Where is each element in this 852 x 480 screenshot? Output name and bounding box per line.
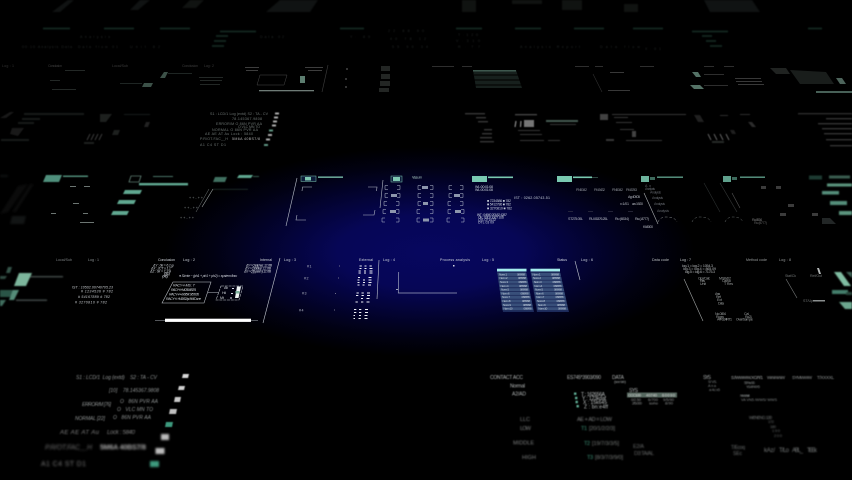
formula text block: ΔY : 0k = 6.1 ψ xyxy=(152,264,174,268)
third layer: left text block: P.R/OT.FAC__H xyxy=(200,137,228,141)
far layer: dim data row text: Y: 89 xyxy=(350,35,370,39)
panel: data code log: Data xyxy=(718,302,724,306)
panel: data code log: Cat.No xyxy=(722,279,731,283)
readout text: center upper right: OK : 02/03 10/27 1/26 xyxy=(478,216,504,220)
formula text block: ΔX : JCT x 1.1° xyxy=(150,266,173,270)
panel: measurements #1 to #4 with dot grid: #2 xyxy=(304,276,308,280)
mid-far panel row: right xyxy=(432,66,852,93)
panel: data code log: MSB/02 xyxy=(719,276,731,280)
panel: data code log xyxy=(652,258,753,322)
coordinates list with teal bullets: X : 15k645 xyxy=(583,400,607,406)
SYS mini table: 2/5.000 xyxy=(632,400,643,406)
bottom-right: contact panel text: A2/AD xyxy=(512,392,526,398)
bottom-right: risk levels blurred xyxy=(513,417,654,461)
readout text: upper right panel: Analysis xyxy=(654,202,665,206)
bottom-right: risk levels blurred: LLC xyxy=(520,417,530,423)
third layer: left text block: 5M6A 40BS7/8 xyxy=(232,137,260,141)
mid-far panel row: left: Log : 1 xyxy=(2,64,14,68)
far layer: dim data row text: Analysis xyxy=(80,35,110,39)
panel: measurements #1 to #4 with dot grid: #3 xyxy=(302,292,306,296)
table left: 088/88 xyxy=(522,295,530,299)
bottom-right: contact panel text xyxy=(490,375,677,410)
third layer: left text block: NORMAL O 86N PVR AA xyxy=(212,128,259,132)
small indicator box: Ab xyxy=(224,286,228,290)
panel: data code log: Cal xyxy=(744,312,749,316)
table left: Norm 4 xyxy=(500,284,509,288)
panel: data code log: log.1 = log.2 = 1054.3 xyxy=(682,264,713,268)
bottom-left: heavily blurred foreground: A1 C4 ST D1 xyxy=(41,461,86,468)
bottom-right: system panel: S:/WWWW.XGR/1 xyxy=(731,375,763,380)
log box with four rows xyxy=(162,282,219,303)
bottom-right: system panel: YI:14:R4:X5 xyxy=(746,385,760,389)
status text lines: [10] 78.145367.9808 xyxy=(108,388,159,394)
panel: method code log: ST/Up xyxy=(803,299,813,303)
far layer: dim data row text: Data flow xyxy=(600,45,640,49)
panel: status tables xyxy=(497,258,593,312)
bottom-right: risk levels blurred: MIDDLE xyxy=(513,440,534,446)
far layer: dim data row text: R:77 xyxy=(458,45,480,49)
bottom-right: system list and blurred footer: 180 xyxy=(770,424,777,429)
readout text: center upper right xyxy=(475,185,550,224)
coordinates list with teal bullets: Y : 123kdaf xyxy=(582,396,607,402)
panel: measurements #1 to #4 with dot grid xyxy=(299,258,379,319)
thin lines and labels: upper-left panel: + + - + + xyxy=(184,206,198,210)
teal data bars: upper right edge xyxy=(809,176,852,215)
bottom-right: system list and blurred footer: T/Lo xyxy=(779,448,790,454)
status text lines: O VLC MN TO xyxy=(117,407,153,413)
IST text block: # 3270810 # 782 xyxy=(75,300,107,304)
panel: data code log: Over/Sample xyxy=(736,318,753,322)
table left: Norm 3 xyxy=(500,280,508,284)
table right: 088/88 xyxy=(557,303,565,307)
panel: process analysis axis chart: Log : 5 xyxy=(482,258,494,262)
bottom-right: system list and blurred footer: SEc xyxy=(733,451,742,457)
table right: 088/88 xyxy=(556,299,565,303)
readout text: upper right panel: Ru:(6534) xyxy=(615,217,629,221)
panel: status tables: Status xyxy=(557,258,567,262)
table left xyxy=(497,269,534,312)
table left: Norm 6 xyxy=(502,291,510,295)
far layer: dim data row text: 40 78 12 xyxy=(390,37,426,41)
log headings row xyxy=(56,258,296,262)
panel: data code log: Unit xyxy=(700,282,706,286)
far layer: dim data row text: Analysis Report xyxy=(520,45,580,49)
readout text: center upper right: ■ 5412786 ■ 782 xyxy=(487,202,511,206)
small indicator box: Mt xyxy=(220,296,224,300)
third layer: left text block: 78.145367.9808 xyxy=(232,117,262,121)
bottom-right: system panel: T/XXXXL xyxy=(817,375,834,380)
slanted divider xyxy=(377,260,379,299)
table left: 088/88 xyxy=(518,276,526,280)
bottom-right: system panel: S/ VS. xyxy=(708,380,717,384)
table right: Norm 10 xyxy=(538,307,548,311)
panel: process analysis axis chart: Process analysis xyxy=(440,258,470,262)
formula text block: ΔY = Q(alpha) : 12.7/B xyxy=(245,264,273,268)
bottom-left: blurred foreground lines xyxy=(59,430,136,436)
bottom-right: risk levels blurred: T1 xyxy=(581,426,587,432)
status text lines: ERROR/M [76] xyxy=(82,402,112,408)
SYS mini table: 6/700 xyxy=(648,397,659,402)
readout text: upper right panel: Analysis xyxy=(650,190,661,194)
table right: 088/88 xyxy=(552,276,560,280)
log headings row: Log : 3 xyxy=(284,258,296,262)
bottom-right: system list and blurred footer: 172 xyxy=(768,419,775,424)
panel: status tables: Log : 6 xyxy=(581,258,593,262)
bottom-left: heavily blurred foreground: 5M6A 40BS7/8 xyxy=(100,444,146,452)
log headings row: Internal xyxy=(260,258,272,262)
SYS mini table: CCC100 xyxy=(628,392,642,398)
panel: measurements #1 to #4 with dot grid: #1 xyxy=(307,264,312,268)
panel: method code log: Log : 8 xyxy=(779,258,791,262)
bottom-left: blurred foreground lines: Lock : 5840 xyxy=(107,430,136,436)
far layer: dim data row text xyxy=(22,29,661,51)
bottom-right: risk levels blurred: [8/3/7/3/9/0] xyxy=(595,455,623,461)
coordinates list with teal bullets: Z : bn:e4ff xyxy=(584,404,609,410)
readout text: upper right panel: FM.5432 xyxy=(594,188,605,192)
panel: data code log: Data code xyxy=(652,258,669,262)
readout text: upper right panel: Ag 40905 xyxy=(628,195,640,199)
panel: data code log: Res xyxy=(700,279,705,283)
table right: 088/88 xyxy=(558,307,566,311)
bottom-right: system panel: VA VN5 /WWS/ WWS xyxy=(741,398,777,402)
third layer: left text block: O VLC MN TO xyxy=(238,125,260,129)
readout text: center upper right: ■ 3270810 ■ 782 xyxy=(487,206,512,210)
third layer: left text block: AE AE AT Au Lock : 5840 xyxy=(205,132,253,136)
status text lines: O 86N PVR AA xyxy=(120,399,159,405)
SYS mini table: 9/5/90 xyxy=(663,397,675,402)
panel: method code log: Ref/Out xyxy=(810,274,822,278)
dot grid group 1 xyxy=(354,266,372,319)
status text lines: S1 : LCD/1 Log (extd) S2 : TA - CV xyxy=(76,375,158,381)
table right: 088/88 xyxy=(554,284,562,288)
bottom-left: heavily blurred foreground xyxy=(41,434,169,468)
slanted divider xyxy=(263,258,280,323)
table left: 088/88 xyxy=(522,299,530,303)
third layer: left text block: A1 C4 ST D1 xyxy=(200,143,226,147)
readout text: center upper right: ■ 7234586 ■ 782 xyxy=(487,199,511,203)
SYS mini table: so/no xyxy=(649,400,659,406)
formula text block: ΔX = Q(system) 12.7/B xyxy=(243,270,272,274)
far layer: dim data row text: Data 02 xyxy=(260,35,284,39)
bottom-right: system panel: a:4c:x5 xyxy=(709,388,720,392)
thin lines and labels: upper-left panel: + + - + + xyxy=(189,196,203,200)
third layer: center-right block xyxy=(465,113,756,143)
bottom-right: contact panel text: Normal xyxy=(510,384,525,390)
IST text block xyxy=(72,286,113,304)
bottom-right: system list and blurred footer: TEEk xyxy=(807,448,818,454)
readout text: center upper right: WL:00:01:08 xyxy=(475,188,493,192)
third layer: left text block xyxy=(200,112,269,147)
readout text: upper right panel: Analysis xyxy=(652,196,663,200)
readout text: upper right panel: Analysis xyxy=(657,209,669,213)
panel: process analysis axis chart: Log : 4 xyxy=(383,258,395,262)
log headings row: Log : 2 xyxy=(183,258,195,262)
mid-far panel row: left: Local/Sub xyxy=(112,64,128,68)
SYS mini table: 8/90 xyxy=(665,400,674,406)
mid-far panel row: left xyxy=(2,64,223,90)
panel: data code log: Ext xyxy=(717,298,722,302)
bottom-right: system list and blurred footer: T/Ecoq xyxy=(731,445,745,451)
third layer: left chip column xyxy=(264,112,279,146)
bottom-right: system panel: Ana xyxy=(708,384,717,388)
readout text: center upper right: WL:00:01:08 xyxy=(475,185,493,189)
top bar headers: center xyxy=(301,176,765,182)
log box with four rows: RACY+/-+M030: 8/S/74 xyxy=(171,288,196,292)
readout text: upper right panel: P.N5342 xyxy=(576,188,587,192)
bottom-right: system list and blurred footer: kAz/ xyxy=(764,448,775,454)
readout text: upper right panel: Ax xyxy=(645,184,651,188)
readout text: upper right panel: FM.5743 xyxy=(626,188,637,192)
log box with four rows: RACY+/-MS : T xyxy=(173,284,196,288)
far layer: dim teal header row xyxy=(43,28,822,47)
bottom-right: system panel: NW WW/V4 xyxy=(740,394,750,398)
top bar headers: center: Vacuum xyxy=(412,176,422,180)
table right: 088/88 xyxy=(552,280,561,284)
bottom-right: risk levels blurred: HIGH xyxy=(522,455,536,461)
table left: 088/88 xyxy=(523,303,531,307)
panel: data code log: Log : 7 xyxy=(680,258,691,262)
bottom-left: status list with chips xyxy=(75,374,189,427)
bottom-right: system list and blurred footer: 200 xyxy=(774,433,783,438)
readout text: center upper right: DTL 03 09 xyxy=(478,220,494,224)
table right: Norm 1 xyxy=(532,272,541,276)
white progress bar xyxy=(155,319,258,322)
formula text block: ΔY = Q(delta) : 12.7/B xyxy=(244,266,272,270)
SYS mini table: 0/2.50 xyxy=(631,397,642,402)
table left: Norm 10 xyxy=(504,307,513,311)
panel: data code log: T Res xyxy=(724,282,733,286)
readout text: upper right panel: Ru:(-8777) xyxy=(635,217,649,221)
panel: method code log: Method code xyxy=(746,258,767,262)
table right: Norm 6 xyxy=(536,291,544,295)
table left: 088/88 xyxy=(520,288,528,292)
panel: data code log: log.3 = log.4 = 865.09 xyxy=(683,267,716,271)
small indicator box: Hd xyxy=(222,291,226,295)
bottom-right: system panel: WWWWW xyxy=(767,375,786,380)
table left: 088/88 xyxy=(524,307,532,311)
teal chips: right edge xyxy=(832,272,852,309)
table left: Norm 5 xyxy=(501,288,509,292)
table right: Norm 9 xyxy=(538,303,546,307)
table right: Norm 8 xyxy=(537,299,545,303)
panel: left mid conclusion log xyxy=(56,258,296,323)
table left: Norm 2 xyxy=(500,276,508,280)
status text lines xyxy=(75,375,159,422)
bottom-right: system panel: 5.5 Rev S/0. xyxy=(744,381,755,385)
panel: data code log: Ru:pw xyxy=(716,315,724,319)
bottom-right: system list and blurred footer xyxy=(731,415,818,457)
table right: Norm 3 xyxy=(534,280,542,284)
IST text block: # 54167889 # 782 xyxy=(78,295,110,299)
table left: Norm 9 xyxy=(503,303,511,307)
far layer: dim data row text: X:01 xyxy=(645,47,661,51)
table right xyxy=(530,269,569,312)
table left: 088/88 xyxy=(518,280,527,284)
small indicator box xyxy=(216,286,243,300)
far layer: dim data row text: V:310 xyxy=(456,39,480,43)
log box with four rows: RACY+/-+M3/54: 9/5T/36 xyxy=(169,292,199,296)
table right: 088/88 xyxy=(551,272,559,276)
status text lines: O 86N PVR AA xyxy=(113,415,152,421)
bottom-right: contact panel text: DATA xyxy=(612,375,625,381)
far layer: top fragments xyxy=(52,0,760,12)
bottom-left: heavily blurred foreground: P.R/OT.FAC__H xyxy=(45,444,93,452)
bottom-right: contact panel text: CONTACT ACC xyxy=(490,375,523,381)
panel: measurements #1 to #4 with dot grid: External xyxy=(359,258,373,262)
dim diagonal lines and marks: far upper right xyxy=(704,183,836,225)
bottom-right: risk levels blurred: LOW xyxy=(520,426,532,432)
readout text: upper right panel xyxy=(568,184,669,229)
readout text: center upper right: INT : 04980 20182 4287 xyxy=(477,213,507,217)
bottom-right: risk levels blurred: AE + AD = LOW xyxy=(577,417,613,423)
table right: Norm 5 xyxy=(535,288,543,292)
far layer: dim data row text: 22 88 90 xyxy=(388,29,424,33)
thin lines and labels: upper-left panel xyxy=(51,186,213,223)
equation line: ● S/mirr ~ (ph1 + ph1 + ph2) = system flow xyxy=(179,274,237,278)
far layer: dim data row text: Data flow 01 xyxy=(78,45,118,49)
readout text: upper right panel: aa 1920 xyxy=(632,202,643,206)
readout text: upper right panel: ST275.05L xyxy=(568,217,583,221)
dim diagonal lines and marks: far upper right: Ru: 8534 xyxy=(752,218,762,222)
bottom-right: risk levels blurred: D3:TA/AL xyxy=(634,451,654,457)
bottom-right: system list and blurred footer: 190 xyxy=(772,428,781,433)
readout text: upper right panel: KI:8000 xyxy=(643,225,653,229)
table right: 088/88 xyxy=(555,291,563,295)
table right: 088/88 xyxy=(556,295,564,299)
panel: data code log: AFKS34/R T1 xyxy=(717,318,732,322)
table left: 088/88 xyxy=(520,291,529,295)
log box with four rows: RACY+/-+M3/52/pt 8/4/Cone xyxy=(166,297,201,301)
formula text block: (045) xyxy=(162,274,168,278)
IST text block: # 1234536 # 782 xyxy=(81,290,113,294)
status text lines: NORMAL [22] xyxy=(75,416,106,422)
log headings row: Log : 1 xyxy=(88,258,99,262)
teal data bars: upper-left panel xyxy=(43,175,259,215)
mid-far panel row: left: Log : 2 xyxy=(204,64,214,68)
mid-far panel row: left: Conclusion xyxy=(182,64,198,68)
readout text: center upper right: IST : 0262.05743.51 xyxy=(514,196,550,200)
bracket grid: 3 columns by 5 rows xyxy=(382,186,464,222)
SYS mini table: 60090 xyxy=(662,392,676,398)
formula text block xyxy=(149,264,273,278)
table left: 088/88 xyxy=(519,284,527,288)
far layer: dim data row text: Unit 82 xyxy=(130,45,160,49)
readout text: upper right panel: RU.06376.25L xyxy=(589,217,608,221)
far layer: dim data row text: T:120 xyxy=(458,33,478,37)
slanted divider xyxy=(575,261,580,280)
panel: method code log xyxy=(746,258,825,303)
bottom-right: contact panel text: ES745*3903/090 xyxy=(567,375,601,381)
table left: Norm 1 xyxy=(499,272,507,276)
third layer: far right text block xyxy=(798,113,852,146)
panel frame: viewfinder with corner brackets xyxy=(286,178,383,226)
panel: data code log: No. 0854 xyxy=(715,312,726,316)
table right: 088/88 xyxy=(554,288,562,292)
readout text: upper right panel: x:1/01 xyxy=(620,202,629,206)
third layer: left text block: ERROR/M O 86N PVR AA xyxy=(216,122,263,126)
dashed ring markers: upper right xyxy=(658,217,743,222)
bottom-left: blurred foreground lines: AE AE AT Au xyxy=(59,430,100,436)
far layer: dim data row text: 55 90 34 xyxy=(392,45,428,49)
table left: 088/88 xyxy=(517,272,525,276)
thin lines and labels: upper-left panel: + + - + + xyxy=(180,216,194,220)
panel: data code log: Ana xyxy=(715,292,720,296)
SYS mini table: SYS xyxy=(629,388,639,394)
teal chips: far left edge xyxy=(0,267,63,306)
bottom-right: risk levels blurred: T3 xyxy=(587,455,593,461)
bottom-right: system panel: SYS xyxy=(703,375,712,381)
bottom-right: system panel: SYMWWW xyxy=(792,375,813,380)
third layer: left text block: S1 : LCD/1 Log (extd) S2 : TA - CV xyxy=(210,112,269,116)
bottom-right: risk levels blurred: T2 xyxy=(584,441,590,447)
bottom-right: risk levels blurred: [20/1/2/2/3] xyxy=(589,426,615,432)
bottom-right: system list and blurred footer: WENENG : 130 xyxy=(749,415,772,420)
third layer: far left panel xyxy=(0,112,150,144)
panel: data code log: Ru:21 xyxy=(745,315,752,319)
table right: Norm 4 xyxy=(534,284,543,288)
SYS mini table xyxy=(627,388,677,406)
far-left blurred diagonal strokes xyxy=(0,175,34,224)
dim diagonal lines and marks: far upper right: Ru:(8777) xyxy=(754,221,767,225)
bottom-right: system panel xyxy=(703,375,834,402)
far layer: dim data row text: 00:10 Analysis Data xyxy=(22,45,72,49)
mid-far panel row: left: Conclusion xyxy=(48,64,62,68)
table right: Norm 2 xyxy=(533,276,541,280)
panel: data code log: log.5 = log.6 = 7175.3 xyxy=(685,270,715,274)
panel: data code log: Ref xyxy=(716,295,721,299)
bottom-right: risk levels blurred: E2/A xyxy=(633,444,644,450)
SYS mini table: 40740 xyxy=(646,392,658,398)
mid-far panel: small schematic with bar xyxy=(245,65,390,92)
readout text: center upper right: QTL 07 14 22 xyxy=(478,218,496,222)
readout text: upper right panel: P.N5342 xyxy=(612,188,623,192)
formula text block: ΔZ : 0k = 1.3 θ xyxy=(149,270,171,274)
coordinates list with teal bullets xyxy=(574,392,609,410)
IST text block: IST : 10502.00740705.23 xyxy=(72,286,113,290)
bottom-right: contact panel text: (see tab) xyxy=(614,379,627,384)
readout text: upper right panel: Analysis xyxy=(645,187,655,191)
log headings row: Local/Sub xyxy=(56,258,72,262)
panel: method code log: Stat/Ck xyxy=(785,274,796,278)
bottom-right: risk levels blurred: [19/7/3/3/5] xyxy=(592,441,619,447)
panel: process analysis axis chart xyxy=(383,258,494,293)
bottom-right: system list and blurred footer: ABL_ xyxy=(792,448,804,454)
table right: Norm 7 xyxy=(536,295,545,299)
status chips xyxy=(165,374,189,427)
panel: measurements #1 to #4 with dot grid: #4 xyxy=(299,308,304,312)
coordinates list with teal bullets: T : 162656A xyxy=(581,392,606,398)
log headings row: Conclusion xyxy=(158,258,175,262)
formula text block: (002) xyxy=(164,272,170,276)
table left: Norm 7 xyxy=(502,295,510,299)
panel: data code log: Ops/Calc xyxy=(698,276,710,280)
table left: Norm 8 xyxy=(502,299,511,303)
